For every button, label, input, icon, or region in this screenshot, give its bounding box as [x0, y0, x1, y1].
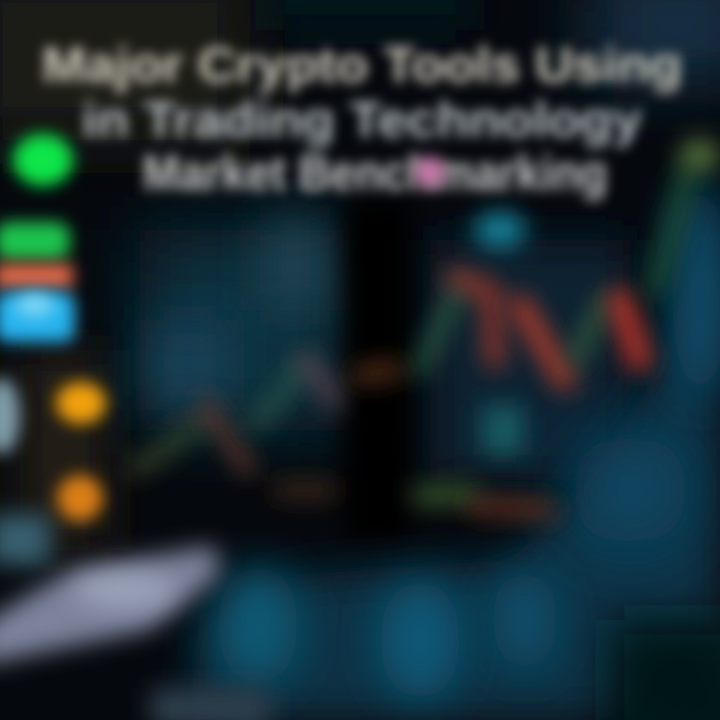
left side panel glow	[0, 378, 50, 565]
icon: green light	[13, 134, 73, 186]
sleeve and forearm	[190, 170, 720, 720]
icon: app stack	[0, 222, 75, 342]
title: in Trading Technology	[82, 92, 642, 148]
chart: teal accents	[474, 139, 720, 455]
title highlight	[416, 157, 444, 187]
icon: amber light	[56, 382, 106, 424]
icon: orange light	[57, 475, 103, 521]
title: Market Benchmarking	[142, 145, 608, 201]
hand	[0, 545, 270, 720]
title	[42, 37, 682, 201]
title: Major Crypto Tools Using	[42, 37, 682, 93]
chart: candlestick trend	[135, 165, 690, 510]
